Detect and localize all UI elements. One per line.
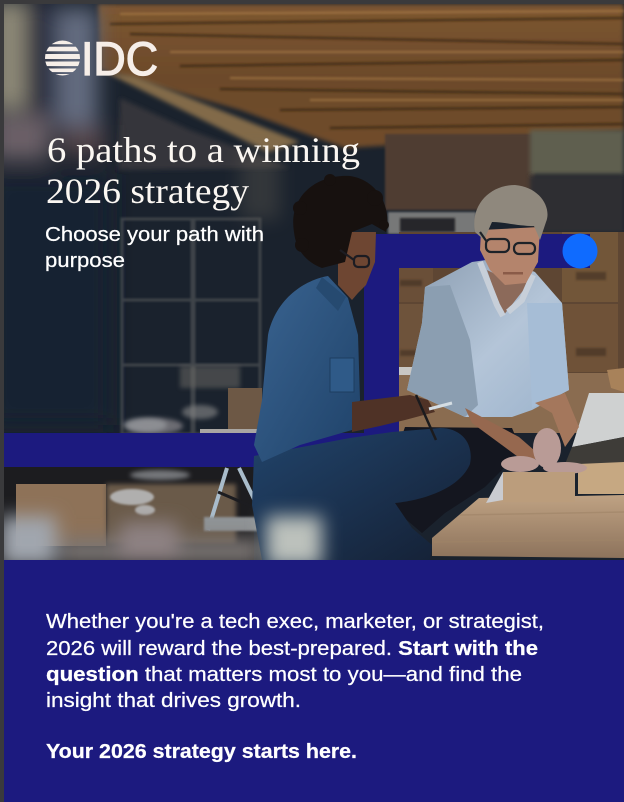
trousers [390, 427, 520, 533]
subtitle: Choose your path with [45, 224, 264, 246]
call to action: Your 2026 strategy starts here. [46, 741, 357, 763]
icon: striped globe [45, 40, 80, 76]
intro text block: 2026 will reward the best-prepared. Start with the [46, 638, 538, 660]
title: 6 paths to a winning [47, 130, 360, 170]
logo: IDC [45, 40, 158, 76]
title [46, 130, 360, 211]
person: woman [252, 174, 471, 560]
subtitle [45, 224, 264, 272]
subtitle: purpose [45, 250, 125, 272]
blurred foreground knee [266, 516, 322, 566]
fabric in box [501, 428, 587, 474]
icon: blue dot [562, 234, 598, 268]
arm [352, 395, 435, 432]
pen and card [416, 395, 436, 440]
intro text block: insight that drives growth. [46, 690, 301, 712]
intro text block: question that matters most to you—and find the [46, 664, 522, 686]
blurred foreground [0, 516, 260, 566]
intro text block: Whether you're a tech exec, marketer, or strategist, [46, 611, 544, 633]
rear wall and shelving [122, 130, 624, 434]
cardboard boxes right [399, 232, 624, 433]
panel: warehouse photo [0, 0, 624, 566]
table and box [432, 393, 624, 558]
face and hair [480, 227, 540, 285]
foreground clutter [4, 415, 257, 546]
cardboard box [503, 472, 575, 498]
panel: intro background [4, 560, 624, 802]
forearms [535, 393, 579, 447]
logo wordmark: IDC [81, 32, 158, 85]
path graphic: navy line and dot [4, 234, 590, 467]
blurred left wall [0, 0, 110, 425]
person: man [390, 185, 579, 533]
jeans [252, 428, 471, 560]
shirt body [407, 258, 569, 417]
intro text block [46, 611, 544, 712]
denim shirt [254, 276, 360, 462]
ceiling timber [98, 4, 624, 170]
hair [293, 176, 387, 268]
neck and face [338, 232, 376, 300]
title: 2026 strategy [46, 171, 249, 211]
